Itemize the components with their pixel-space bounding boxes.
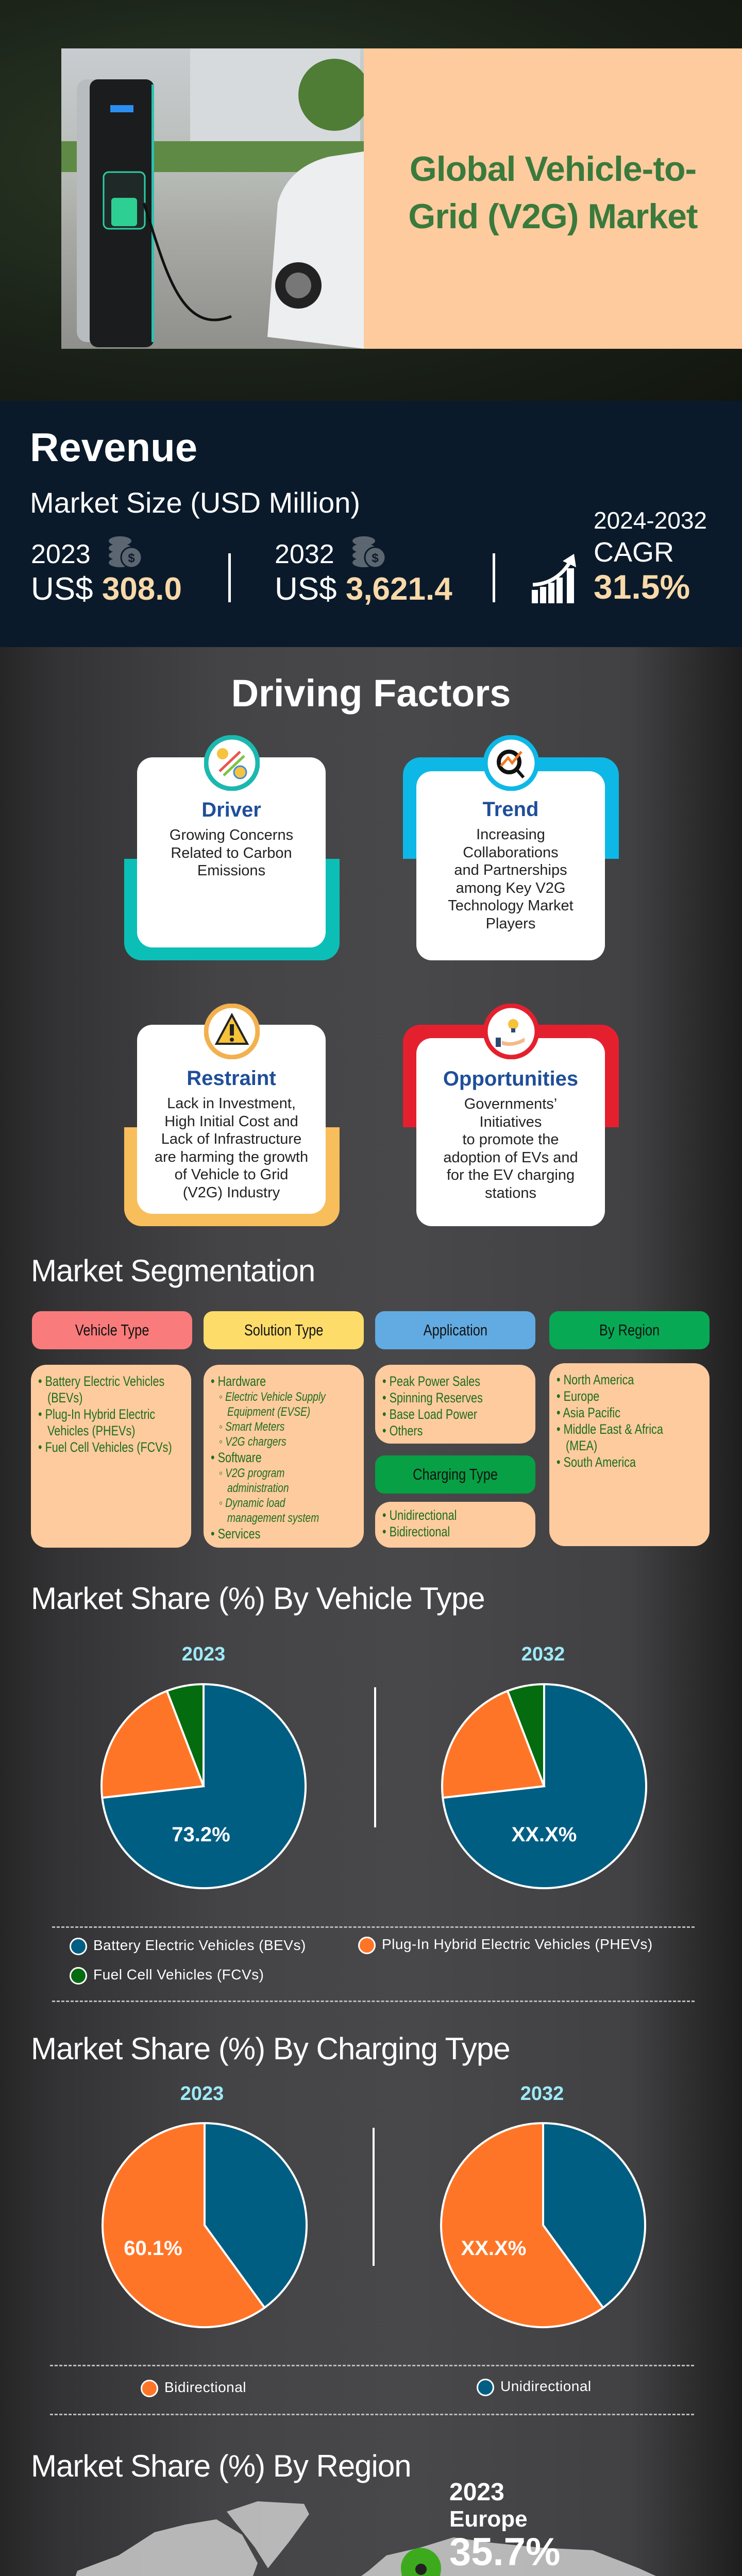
- panel: driver: Related to Carbon: [171, 845, 292, 861]
- segmentation: application: • Others: [382, 1423, 423, 1438]
- pie chart: charging 2023: 60.1%: [124, 2237, 182, 2260]
- panel: driver: Growing Concerns: [170, 827, 293, 843]
- heading: market segmentation: Market Segmentation: [31, 1253, 315, 1288]
- segmentation: region: • Middle East & Africa: [556, 1421, 663, 1437]
- segmentation: solution type: ◦ V2G chargers: [219, 1435, 286, 1449]
- stat 2023: [31, 536, 182, 607]
- year label 2023: 2023: [180, 2083, 224, 2105]
- panel: opportunities: for the EV charging: [447, 1167, 575, 1183]
- segmentation: region: [549, 1311, 710, 1546]
- panel: restraint: (V2G) Industry: [183, 1184, 280, 1200]
- panel: restraint: High Initial Cost and: [164, 1113, 298, 1129]
- background: main dark panel: [0, 647, 742, 2576]
- heading: market share by charging type: Market Share (%) By Charging Type: [31, 2031, 510, 2066]
- year label 2032: 2032: [520, 2083, 564, 2105]
- segmentation: vehicle type: Vehicles (PHEVs): [47, 1423, 135, 1438]
- revenue band: [0, 401, 742, 647]
- segmentation: region: • South America: [556, 1454, 636, 1470]
- segmentation: application: • Peak Power Sales: [382, 1374, 480, 1389]
- revenue heading: Revenue: [30, 425, 197, 470]
- legend: charging type: Bidirectional: [164, 2379, 246, 2395]
- panel: opportunities: Initiatives: [480, 1114, 542, 1130]
- panel: trend: Increasing: [476, 826, 545, 843]
- year label 2032: 2032: [521, 1643, 565, 1665]
- panel: driver: Driver: [201, 799, 261, 821]
- divider: [228, 553, 231, 602]
- market size subtitle: Market Size (USD Million): [30, 486, 360, 519]
- legend: vehicle type: Fuel Cell Vehicles (FCVs): [93, 1967, 264, 1982]
- segmentation: vehicle type: • Fuel Cell Vehicles (FCVs): [38, 1439, 172, 1455]
- panel: trend: among Key V2G: [456, 880, 565, 896]
- segmentation: vehicle type: • Battery Electric Vehicles: [38, 1374, 164, 1389]
- segmentation: application: [375, 1311, 535, 1548]
- segmentation: application: • Spinning Reserves: [382, 1390, 483, 1405]
- legend: charging type: [141, 2378, 592, 2397]
- segmentation: vehicle type: [31, 1311, 192, 1548]
- divider: [493, 553, 495, 602]
- legend: vehicle type: Battery Electric Vehicles (BEVs): [93, 1937, 306, 1953]
- panel: opportunities: Governments’: [464, 1096, 557, 1112]
- stat 2023: US$ 308.0: [31, 571, 182, 607]
- panel: opportunities: Opportunities: [443, 1067, 578, 1090]
- icon: coins: $: [372, 551, 379, 565]
- stat 2032: [275, 536, 452, 607]
- segmentation: solution type: ◦ Smart Meters: [219, 1420, 284, 1434]
- icon: idea hand: [484, 1004, 538, 1059]
- segmentation: solution type: ◦ Dynamic load: [219, 1496, 285, 1510]
- segmentation: solution type: ◦ Electric Vehicle Supply: [219, 1390, 326, 1404]
- segmentation: region: (MEA): [566, 1438, 597, 1453]
- heading: driving factors: Driving Factors: [231, 672, 511, 715]
- stat 2032: 2032: [275, 539, 334, 569]
- heading: market share by region: Market Share (%) By Region: [31, 2449, 411, 2483]
- title: Grid (V2G) Market: [408, 197, 698, 236]
- segmentation: region: • Europe: [556, 1388, 599, 1404]
- panel: restraint: are harming the growth: [155, 1149, 308, 1165]
- background: top foliage: [0, 0, 742, 401]
- icon: warning: [204, 1004, 260, 1059]
- pie chart: vehicle 2032: XX.X%: [512, 1823, 577, 1846]
- segmentation: vehicle type: Vehicle Type: [75, 1321, 149, 1339]
- panel: trend: and Partnerships: [454, 862, 567, 878]
- callout: Europe 2023: Europe: [449, 2506, 528, 2532]
- callout: Europe 2023: 2023: [449, 2479, 504, 2506]
- pie chart: vehicle 2023: [100, 1683, 307, 1889]
- segmentation: application: • Base Load Power: [382, 1406, 477, 1422]
- legend: vehicle type: [70, 1936, 653, 1985]
- world map: [75, 2501, 656, 2576]
- panel: restraint: of Vehicle to Grid: [175, 1166, 288, 1183]
- CAGR block: CAGR: [594, 537, 674, 568]
- segmentation: region: • Asia Pacific: [556, 1405, 620, 1420]
- panel: driver: [124, 735, 340, 960]
- segmentation: solution type: • Hardware: [211, 1374, 266, 1389]
- segmentation: solution type: Solution Type: [244, 1321, 323, 1339]
- icon: coins: [109, 536, 141, 567]
- pie chart: charging 2032: [440, 2122, 646, 2329]
- hero photo: charger and car: [61, 48, 364, 349]
- segmentation: solution type: • Software: [211, 1450, 262, 1465]
- panel: trend: [403, 735, 619, 960]
- segmentation: solution type: management system: [227, 1511, 319, 1525]
- panel: trend: Collaborations: [463, 844, 559, 860]
- title panel: [364, 48, 742, 349]
- panel: driver: Emissions: [197, 862, 265, 879]
- segmentation: solution type: • Services: [211, 1526, 260, 1541]
- CAGR block: 2024-2032: [594, 507, 707, 534]
- segmentation: solution type: [204, 1311, 364, 1548]
- panel: trend: Technology Market: [448, 897, 574, 914]
- segmentation: vehicle type: • Plug-In Hybrid Electric: [38, 1406, 155, 1422]
- pie chart: vehicle 2023: 73.2%: [172, 1823, 230, 1846]
- CAGR block: 31.5%: [594, 568, 690, 606]
- CAGR block: [532, 507, 707, 606]
- callout: Europe 2023: 35.7%: [449, 2530, 561, 2574]
- segmentation: application: Application: [423, 1321, 487, 1339]
- stat 2023: 2023: [31, 539, 91, 569]
- icon: trend magnifier: [483, 735, 539, 791]
- pie chart: charging 2032: XX.X%: [461, 2237, 526, 2260]
- segmentation: solution type: Equipment (EVSE): [227, 1405, 310, 1419]
- stat 2032: US$ 3,621.4: [275, 571, 452, 607]
- panel: trend: Players: [486, 915, 535, 931]
- icon: growth chart: [532, 554, 576, 603]
- segmentation: solution type: ◦ V2G program: [219, 1466, 284, 1480]
- icon: map pins: [401, 2548, 441, 2576]
- heading: market share by vehicle type: Market Share (%) By Vehicle Type: [31, 1581, 485, 1616]
- panel: restraint: Lack of Infrastructure: [161, 1131, 301, 1147]
- segmentation: application: • Bidirectional: [382, 1524, 450, 1539]
- callout: Europe 2023: [449, 2479, 561, 2574]
- panel: restraint: [124, 1004, 340, 1226]
- icon: coins: [352, 536, 384, 567]
- year label 2023: 2023: [182, 1643, 225, 1665]
- icon: coins: $: [128, 551, 135, 565]
- divider: [373, 2128, 375, 2266]
- segmentation: region: By Region: [599, 1321, 660, 1339]
- pie chart: charging 2023: [102, 2122, 308, 2329]
- segmentation: vehicle type: (BEVs): [47, 1390, 82, 1405]
- legend: charging type: Unidirectional: [500, 2378, 592, 2394]
- panel: restraint: Restraint: [187, 1067, 276, 1090]
- legend: vehicle type: Plug-In Hybrid Electric Vehicles (PHEVs): [382, 1936, 653, 1952]
- panel: opportunities: adoption of EVs and: [443, 1149, 578, 1165]
- charging type header: Charging Type: [413, 1465, 498, 1483]
- panel: opportunities: to promote the: [463, 1131, 559, 1148]
- panel: opportunities: stations: [485, 1185, 536, 1201]
- charging type header: [375, 1455, 535, 1494]
- pie chart: vehicle 2032: [441, 1683, 647, 1889]
- segmentation: region: • North America: [556, 1372, 634, 1387]
- segmentation: solution type: administration: [227, 1481, 289, 1495]
- icon: driver gears: [204, 735, 260, 791]
- panel: opportunities: [403, 1004, 619, 1226]
- panel: trend: Trend: [483, 798, 538, 821]
- divider: [374, 1687, 376, 1827]
- title: [408, 149, 698, 236]
- panel: restraint: Lack in Investment,: [167, 1095, 296, 1112]
- title: Global Vehicle-to-: [410, 149, 696, 189]
- segmentation: application: • Unidirectional: [382, 1507, 457, 1523]
